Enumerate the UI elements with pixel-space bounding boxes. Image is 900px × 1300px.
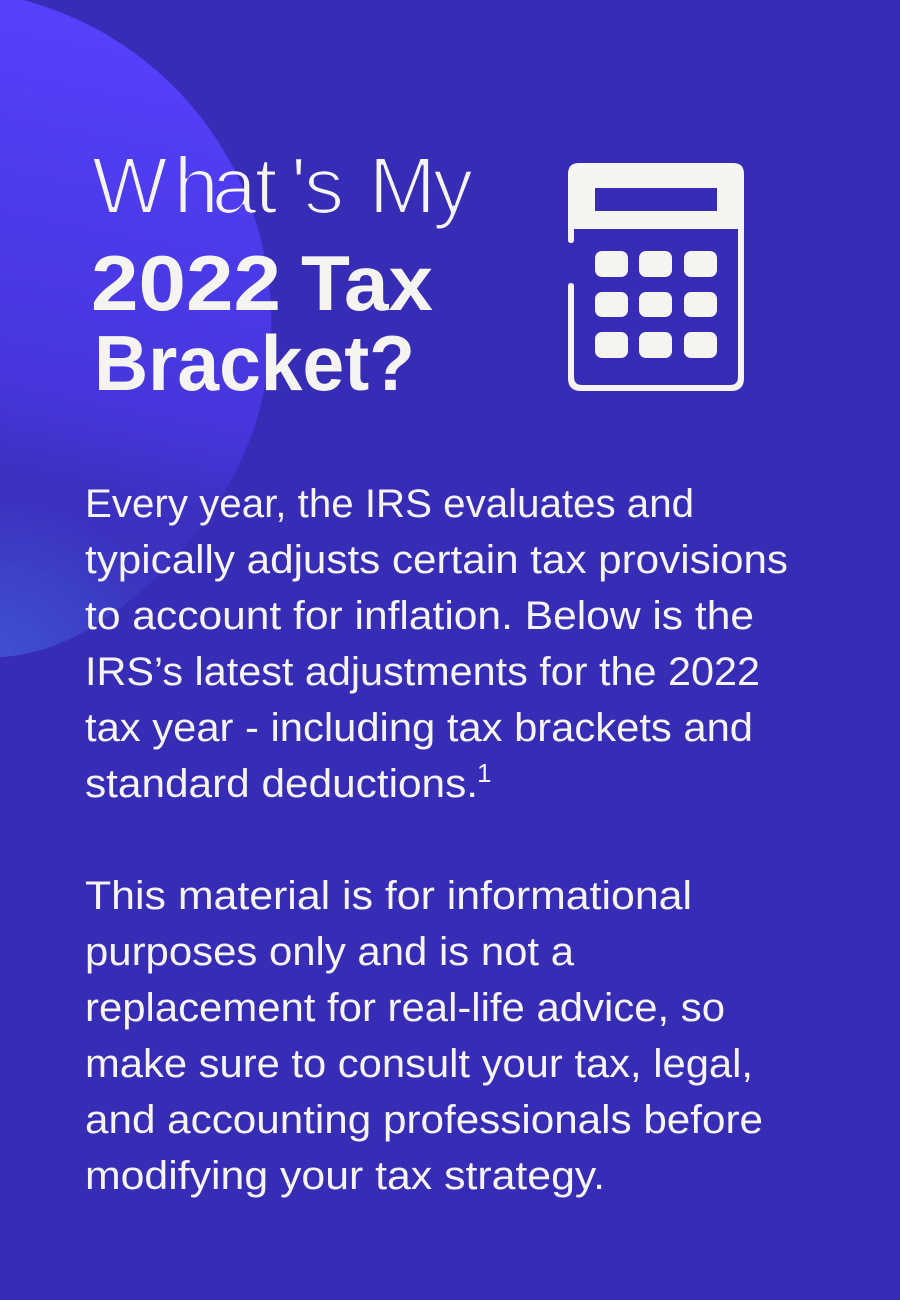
text block: disclaimer paragraph — [85, 874, 763, 1198]
title line: 2022 Tax: 2022 — [91, 239, 281, 327]
title line: 2022 Tax: Tax — [301, 239, 433, 327]
text block: disclaimer paragraph: modifying your tax strategy. — [85, 1154, 605, 1198]
text block: disclaimer paragraph: This material is for informational — [85, 874, 692, 918]
title — [91, 141, 473, 407]
text block: disclaimer paragraph: and accounting professionals before — [85, 1098, 763, 1142]
icon: calculator — [568, 163, 744, 391]
text block: disclaimer paragraph: replacement for real-life advice, so — [85, 986, 725, 1030]
text block: intro paragraph: 1 — [477, 758, 491, 788]
text block: disclaimer paragraph: make sure to consult your tax, legal, — [85, 1042, 753, 1086]
text block: intro paragraph: standard deductions. — [85, 762, 478, 806]
text block: intro paragraph: Every year, the IRS evaluates and — [85, 482, 694, 526]
text block: intro paragraph: IRS’s latest adjustments for the 2022 — [85, 650, 760, 694]
title line: 2022 Tax — [91, 239, 433, 327]
title line: What's My: What's My — [92, 141, 473, 230]
text block: intro paragraph — [85, 482, 788, 806]
text block: intro paragraph: typically adjusts certain tax provisions — [85, 538, 788, 582]
text block: intro paragraph: to account for inflation. Below is the — [85, 594, 754, 638]
decorative gradient circle — [0, 0, 271, 660]
text block: intro paragraph: tax year - including tax brackets and — [85, 706, 753, 750]
text block: disclaimer paragraph: purposes only and is not a — [85, 930, 574, 974]
title line: Bracket?: Bracket? — [94, 319, 415, 407]
